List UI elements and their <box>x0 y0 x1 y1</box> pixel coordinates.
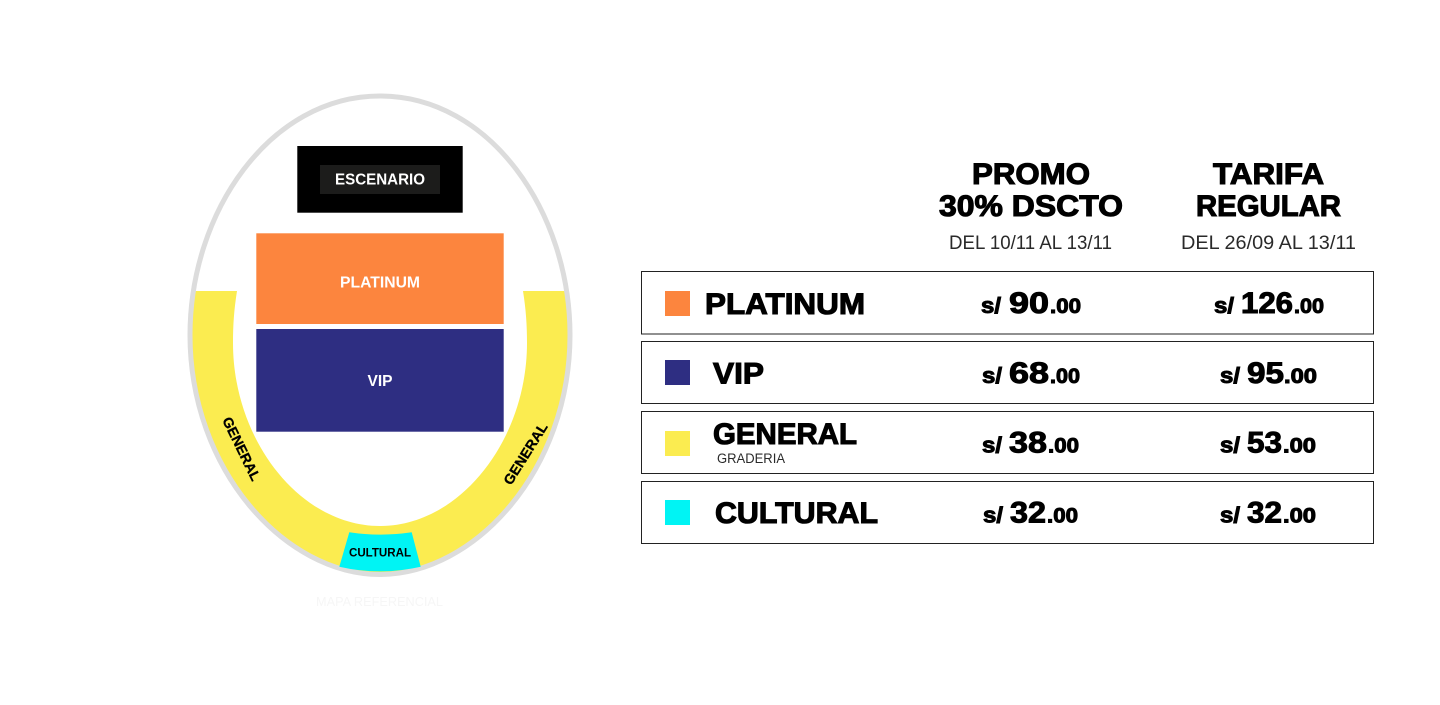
seating map <box>190 96 570 609</box>
price: regular general <box>1220 426 1316 460</box>
zone: cultural <box>339 532 421 571</box>
column heading: regular: TARIFA <box>1213 158 1324 191</box>
zone: platinum: PLATINUM <box>340 274 420 291</box>
price: promo general: .00 <box>1048 434 1079 458</box>
column heading: promo: PROMO <box>972 158 1090 191</box>
price: regular cultural: .00 <box>1283 504 1316 528</box>
column heading: regular <box>1181 158 1356 254</box>
swatch: cultural <box>665 500 690 525</box>
venue outline <box>190 96 570 574</box>
price: regular general: .00 <box>1283 434 1316 458</box>
price: promo general <box>982 426 1079 460</box>
zone: vip: VIP <box>368 373 393 390</box>
price: promo general: 38 <box>1009 426 1047 460</box>
price: promo vip <box>982 357 1080 390</box>
column heading: regular: REGULAR <box>1196 190 1341 223</box>
price: promo general: s/ <box>982 432 1002 458</box>
swatch: vip <box>665 360 690 385</box>
price: promo platinum: 90 <box>1009 287 1049 320</box>
zone: cultural: CULTURAL <box>349 546 411 560</box>
row: platinum <box>642 272 1374 334</box>
sublabel: graderia: GRADERIA <box>717 451 785 466</box>
price: promo platinum: .00 <box>1050 295 1081 318</box>
price: regular platinum: s/ <box>1214 293 1234 318</box>
zone: platinum <box>256 233 504 324</box>
price: regular vip: .00 <box>1284 365 1317 388</box>
zone: general seating <box>192 291 568 572</box>
column heading: promo: DEL 10/11 AL 13/11 <box>949 232 1112 254</box>
name: cultural: CULTURAL <box>715 497 878 530</box>
caption: reference map: MAPA REFERENCIAL <box>316 594 443 609</box>
column heading: promo: 30% DSCTO <box>939 190 1123 223</box>
price: promo cultural: .00 <box>1047 504 1078 528</box>
price: promo vip: s/ <box>982 363 1002 388</box>
price: promo cultural: s/ <box>983 502 1003 528</box>
price: promo vip: 68 <box>1009 357 1049 390</box>
price: promo cultural <box>983 496 1078 530</box>
price: regular vip: 95 <box>1247 357 1284 390</box>
zone: vip <box>256 329 504 432</box>
price: regular vip <box>1220 357 1317 390</box>
price: regular general: s/ <box>1220 432 1240 458</box>
label: general left: GENERAL <box>219 414 264 484</box>
price: regular platinum <box>1214 287 1324 320</box>
row: vip <box>642 342 1374 404</box>
price: regular cultural: s/ <box>1220 502 1240 528</box>
price: regular general: 53 <box>1247 426 1282 460</box>
label: general right: GENERAL <box>500 419 551 488</box>
price: regular vip: s/ <box>1220 363 1240 388</box>
stage: ESCENARIO <box>335 171 425 188</box>
row: cultural <box>642 482 1374 544</box>
swatch: general <box>665 431 690 456</box>
price: regular cultural <box>1220 496 1316 530</box>
name: vip: VIP <box>713 358 764 390</box>
name: platinum: PLATINUM <box>705 288 865 321</box>
column heading: promo <box>939 158 1123 254</box>
row: general <box>642 412 1374 474</box>
price: promo vip: .00 <box>1050 365 1080 388</box>
price: promo platinum: s/ <box>981 293 1001 318</box>
price: promo platinum <box>981 287 1081 320</box>
price: promo cultural: 32 <box>1010 496 1046 530</box>
swatch: platinum <box>665 291 690 316</box>
stage <box>297 146 463 213</box>
name: general: GENERAL <box>713 418 857 451</box>
price: regular cultural: 32 <box>1247 496 1282 530</box>
price: regular platinum: .00 <box>1294 295 1324 318</box>
column heading: regular: DEL 26/09 AL 13/11 <box>1181 232 1356 254</box>
price: regular platinum: 126 <box>1241 287 1293 320</box>
